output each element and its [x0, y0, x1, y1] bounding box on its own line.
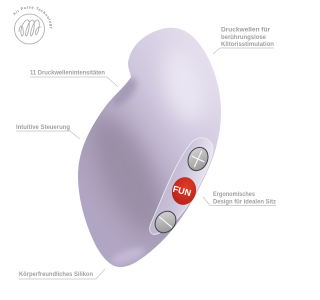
- infographic canvas: [13, 6, 276, 280]
- label: Intuitive Steuerung: Intuitive Steuerung: [16, 124, 70, 131]
- label: Druckwellen: Druckwellen für: [221, 26, 270, 34]
- minus button: [151, 207, 180, 237]
- label: Körperfreundliches Silikon: Körperfreundliches Silikon: [19, 271, 93, 278]
- label: 11 Druckwellenintensitäten: 11 Druckwellenintensitäten: [30, 70, 105, 76]
- FUN button: FUN: [172, 184, 192, 198]
- label: Körperfreundliches Silikon: [19, 269, 105, 279]
- control panel: [150, 138, 213, 237]
- label: Ergonomisches Design: [203, 191, 277, 206]
- label: Druckwellen: Klitorisstimulation: [221, 41, 274, 48]
- air pulse technology badge: Air Pulse Technology: [13, 6, 52, 29]
- label: Ergonomisches Design: Ergonomisches: [213, 191, 255, 198]
- label: Ergonomisches Design: Design für idealen Sitz: [213, 198, 277, 206]
- label: Druckwellen: berührungslose: [221, 34, 266, 41]
- plus button: [184, 144, 212, 174]
- label: Intuitive Steuerung: [16, 124, 80, 139]
- label: 11 Druckwellenintensitäten: [30, 70, 118, 87]
- label: Druckwellen: [213, 26, 274, 54]
- air pulse technology badge: [13, 6, 52, 44]
- device body: [78, 28, 221, 268]
